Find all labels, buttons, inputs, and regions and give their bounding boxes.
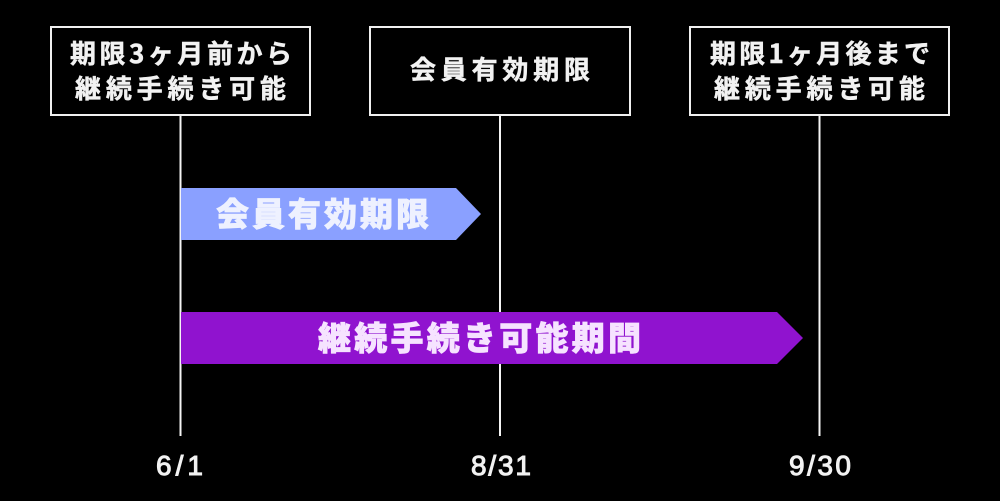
date label: 6/1: 6/1	[156, 450, 203, 481]
timeline line: 6/1	[180, 115, 182, 436]
timeline line: 8/31	[499, 115, 501, 436]
callout: renewal until 1 month after: 継続手続き可能	[714, 69, 925, 106]
callout: renewal opens 3 months before	[51, 27, 310, 115]
callout: renewal opens 3 months before: 継続手続き可能	[75, 69, 286, 106]
arrow bar: renewal period	[181, 312, 803, 364]
date label: 9/30: 9/30	[789, 450, 851, 481]
timeline line: 9/30	[818, 115, 820, 436]
arrow bar: renewal period: 継続手続き可能期間	[318, 312, 641, 360]
callout: membership expiry	[370, 27, 630, 115]
date label: 8/31: 8/31	[471, 450, 531, 481]
callout: renewal opens 3 months before: 期限3ヶ月前から	[70, 34, 292, 71]
callout: renewal until 1 month after	[690, 27, 949, 115]
callout: membership expiry: 会員有効期限	[410, 50, 590, 87]
arrow bar: membership period: 会員有効期限	[216, 188, 429, 236]
callout: renewal until 1 month after: 期限1ヶ月後まで	[710, 34, 930, 71]
arrow bar: membership period	[181, 188, 481, 240]
